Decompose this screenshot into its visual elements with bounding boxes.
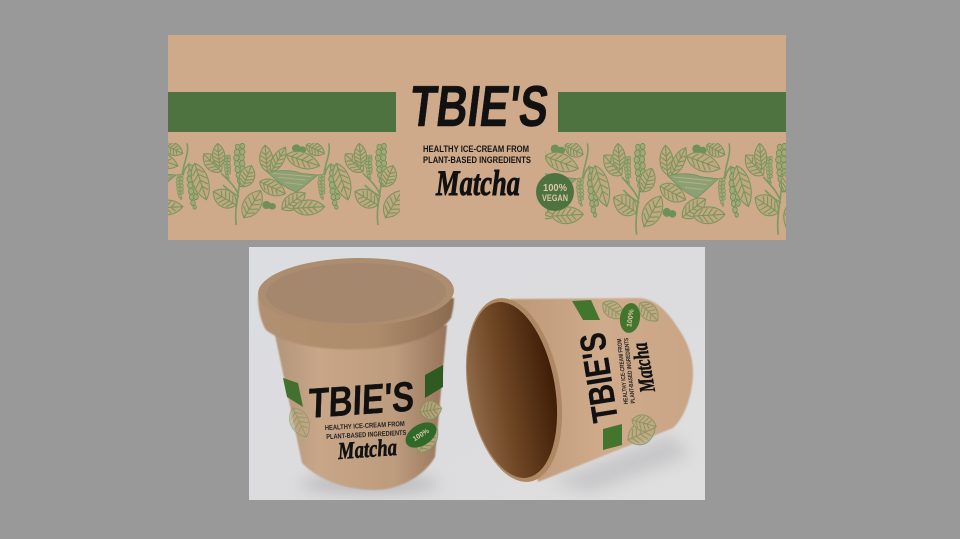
cup body bbox=[275, 325, 447, 490]
vegan badge bbox=[536, 173, 574, 211]
right green patch bbox=[425, 365, 443, 398]
tipped cup green patch top bbox=[572, 300, 600, 320]
tipped cup bbox=[466, 297, 694, 482]
brand title: TBIE'S bbox=[406, 74, 552, 139]
vegan badge: VEGAN bbox=[542, 193, 568, 203]
right cup illustration bbox=[416, 400, 442, 453]
left green patch bbox=[283, 378, 303, 407]
cup tagline bbox=[325, 421, 406, 439]
tipped cup title: TBIE'S bbox=[571, 330, 626, 425]
tipped cup tagline bbox=[617, 337, 637, 404]
upright cup bbox=[257, 256, 455, 490]
tipped cup badge: 100% bbox=[626, 308, 636, 327]
left green band bbox=[168, 92, 396, 132]
tipped cup green patch bottom bbox=[603, 424, 622, 450]
tagline bbox=[423, 144, 531, 165]
tagline: PLANT-BASED INGREDIENTS bbox=[423, 155, 531, 165]
right plant illustration bbox=[545, 143, 786, 235]
left plant illustration bbox=[168, 143, 400, 226]
flavour name: Matcha bbox=[435, 163, 520, 203]
floor shadows bbox=[300, 435, 690, 492]
cup title: TBIE'S bbox=[308, 373, 415, 427]
tipped cup badge bbox=[620, 303, 640, 333]
cup tagline: HEALTHY ICE-CREAM FROM bbox=[325, 421, 405, 432]
vegan badge: 100% bbox=[543, 183, 567, 194]
cup badge: 100% bbox=[412, 427, 431, 443]
lid bbox=[257, 256, 455, 349]
tipped cup illustration bottom bbox=[628, 414, 657, 446]
tagline: HEALTHY ICE-CREAM FROM bbox=[423, 144, 529, 154]
tipped cup tagline: PLANT-BASED INGREDIENTS bbox=[624, 337, 637, 404]
cup flavour: Matcha bbox=[336, 435, 398, 465]
left cup illustration bbox=[288, 408, 310, 438]
cup badge bbox=[406, 422, 436, 448]
tipped cup mouth bbox=[466, 298, 562, 482]
cup tagline: PLANT-BASED INGREDIENTS bbox=[326, 430, 407, 441]
tipped cup flavour: Matcha bbox=[627, 341, 660, 395]
right green band bbox=[558, 92, 786, 132]
packaging label panel bbox=[168, 35, 786, 240]
tipped cup tagline: HEALTHY ICE-CREAM FROM bbox=[617, 338, 630, 404]
product photo bbox=[249, 247, 705, 500]
tipped cup illustration top bbox=[602, 300, 659, 322]
tipped cup body bbox=[510, 298, 693, 482]
